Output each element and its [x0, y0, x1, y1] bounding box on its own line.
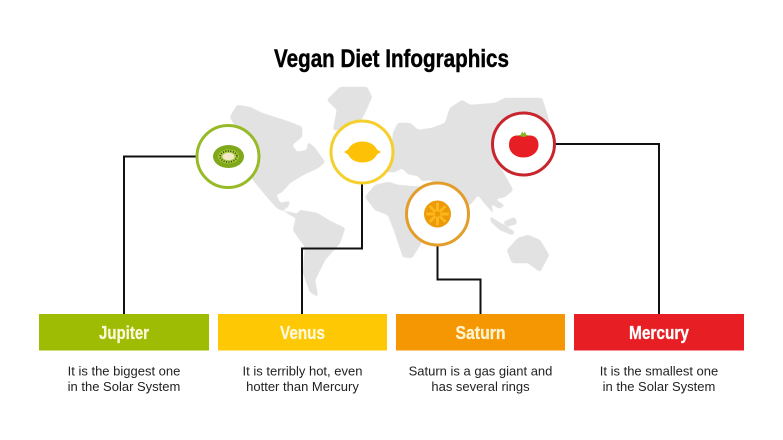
panel: Venus: hotter than Mercury [246, 379, 359, 394]
panel: Jupiter: Jupiter [99, 323, 149, 343]
connector lines [124, 144, 659, 314]
panel: Mercury: Mercury [629, 323, 689, 343]
world map [230, 87, 552, 297]
panel: Saturn [396, 314, 565, 394]
panel: Jupiter [39, 314, 209, 394]
panel: Jupiter: in the Solar System [68, 379, 180, 394]
panel: Mercury: It is the smallest one [600, 364, 718, 378]
panel: Venus [218, 314, 387, 394]
panel: Mercury: in the Solar System [603, 379, 715, 394]
icon: orange slice [406, 183, 468, 245]
panel: Mercury [574, 314, 744, 394]
panel: Saturn: has several rings [431, 379, 530, 394]
title: Vegan Diet Infographics [274, 45, 509, 73]
panel: Jupiter: It is the biggest one [68, 364, 180, 378]
panel: Venus: Venus [280, 323, 325, 343]
icon: kiwi [197, 126, 259, 188]
panel: Saturn: Saturn [456, 323, 506, 343]
panel: Venus: It is terribly hot, even [243, 364, 362, 378]
icon: lemon [331, 121, 393, 183]
icon: tomato [492, 113, 554, 175]
panel: Saturn: Saturn is a gas giant and [409, 364, 552, 378]
